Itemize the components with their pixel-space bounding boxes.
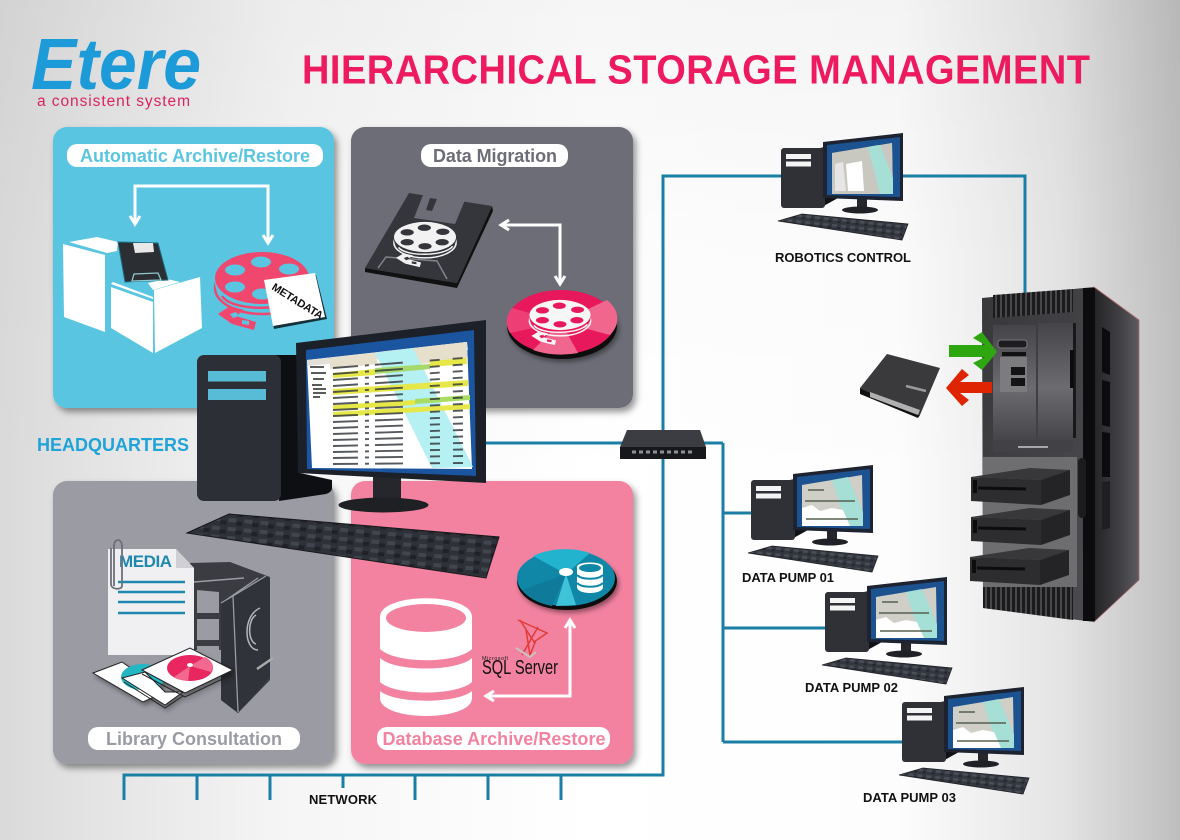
label: data pump 01: DATA PUMP 01 — [742, 570, 834, 585]
lower translucent bay — [983, 457, 1077, 587]
label: data pump 02: DATA PUMP 02 — [805, 680, 898, 695]
monitor stand — [338, 477, 428, 512]
robotics screen — [832, 143, 893, 194]
logo: Etere: a consistent system — [37, 93, 190, 110]
tower — [197, 355, 332, 501]
panel: library consultation — [53, 481, 334, 764]
arrow: database link — [486, 620, 575, 701]
table text rows — [333, 358, 463, 464]
computer: headquarters — [187, 320, 499, 578]
icon: floppy disk on boxes — [118, 242, 168, 282]
note: metadata: METADATA — [269, 281, 325, 322]
server tape library — [982, 287, 1139, 622]
panel: automatic archive/restore — [53, 127, 334, 408]
bottom vent — [983, 587, 1073, 620]
pill heading: library consultation: Library Consultation — [106, 729, 282, 749]
logo: sql server — [482, 620, 558, 679]
icon: disc cases — [93, 648, 233, 708]
icon: white file boxes — [63, 237, 202, 353]
icon: media document: MEDIA — [119, 552, 172, 571]
panel: data migration — [351, 127, 633, 408]
doors — [993, 323, 1076, 452]
computer: data pump 03 — [899, 687, 1029, 794]
network lines — [124, 176, 1025, 800]
label: headquarters: HEADQUARTERS — [37, 435, 189, 455]
yellow and green rows — [333, 358, 470, 417]
label: data pump 03: DATA PUMP 03 — [863, 790, 956, 805]
icon: media document — [108, 540, 194, 655]
arrow: archive loop — [130, 186, 273, 243]
label: robotics control: ROBOTICS CONTROL — [775, 250, 911, 265]
title: HIERARCHICAL STORAGE MANAGEMENT — [302, 47, 1090, 93]
monitor — [296, 320, 486, 483]
network switch — [620, 430, 706, 459]
icon: safe — [190, 562, 273, 713]
logo: sql server: Microsoft — [482, 656, 508, 662]
arrow: green in — [949, 332, 997, 370]
control panel — [998, 340, 1027, 392]
icon: database — [380, 598, 472, 716]
tape drive 2 — [971, 508, 1070, 545]
computer: robotics control — [778, 133, 908, 240]
arrow: red out — [946, 369, 992, 406]
logo: sql server: SQL Server — [482, 657, 558, 679]
panel: database archive/restore — [351, 481, 633, 764]
tape drive 3 — [970, 548, 1069, 585]
icon: tape cartridge — [860, 354, 940, 418]
top vent — [993, 289, 1073, 318]
tree sidebar — [310, 367, 326, 397]
pill heading: automatic archive/restore: Automatic Archive/Restore — [80, 146, 310, 166]
icon: teal database disc — [517, 549, 617, 610]
computer: data pump 01 — [748, 465, 878, 572]
pill heading: data migration: Data Migration — [433, 146, 557, 166]
keyboard — [187, 514, 499, 578]
note: metadata — [264, 273, 327, 329]
computer: data pump 02 — [822, 577, 952, 684]
icon: pink film reel — [215, 252, 309, 330]
tape drive 1 — [971, 468, 1070, 505]
icon: floppy with reel — [365, 193, 493, 288]
pill heading: database archive/restore: Database Archive/Restore — [382, 729, 606, 749]
logo: Etere: Etere — [31, 25, 201, 105]
arrow: migration link — [501, 220, 565, 284]
label: network: NETWORK — [309, 792, 378, 807]
icon: pink disc with reel — [507, 290, 617, 359]
